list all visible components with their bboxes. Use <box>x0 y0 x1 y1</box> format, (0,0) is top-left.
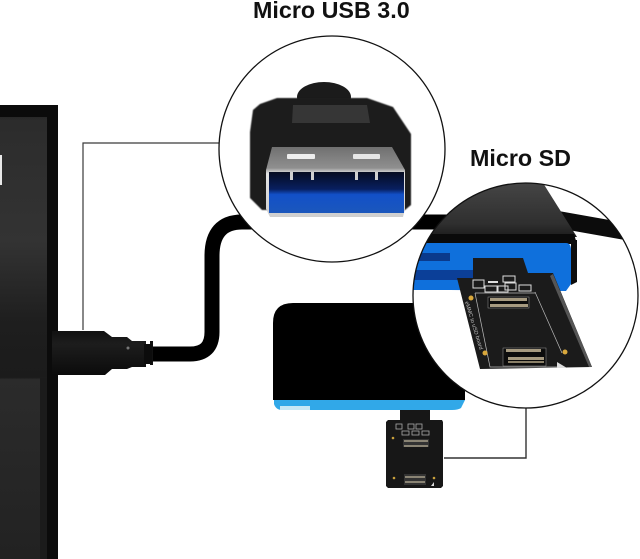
card reader body <box>273 303 465 410</box>
board connector 2 <box>503 348 546 366</box>
icon: reader black top <box>432 184 577 237</box>
board connector 1 <box>488 297 529 308</box>
small microSD board inserted in card reader <box>386 410 443 488</box>
icon: USB connector body <box>250 98 411 210</box>
board inner outline <box>475 292 562 367</box>
computer tower <box>0 105 58 559</box>
icon: reader blue side <box>405 243 571 291</box>
board components <box>473 276 531 292</box>
USB cable <box>150 222 470 354</box>
icon: blue USB 3.0 tongue <box>269 172 404 213</box>
icon: USB metal shell <box>266 147 405 217</box>
heading: Micro SD: Micro SD <box>470 145 571 171</box>
USB plug <box>52 331 153 375</box>
callout: Micro USB 3.0 connector <box>219 36 445 262</box>
icon: microSD adapter board <box>457 258 592 369</box>
board silkscreen text: eMMC to uSD board <box>463 301 483 351</box>
icon: USB connector strain relief <box>297 82 351 99</box>
leader line: microSD board to Micro SD callout <box>444 408 526 458</box>
callout: Micro SD card reader close-up <box>400 183 640 408</box>
leader line: USB plug to Micro USB callout <box>83 143 220 330</box>
cable behind reader <box>560 211 622 240</box>
